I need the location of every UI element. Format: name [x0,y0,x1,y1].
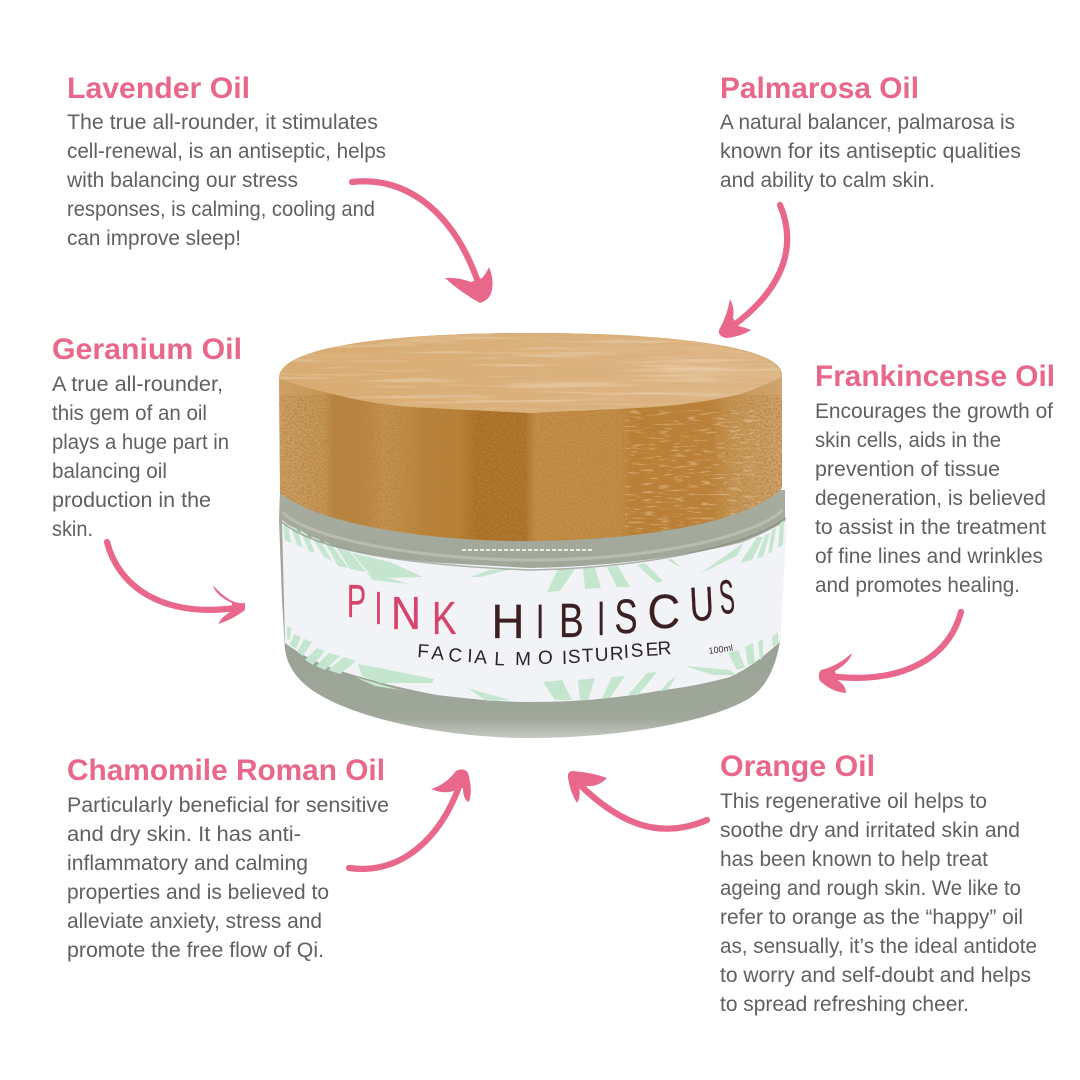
label text: HIBISCUS: I [597,593,605,646]
label text: HIBISCUS: S [614,589,638,643]
label text: HIBISCUS: I [536,596,544,649]
label text: HIBISCUS: B [559,594,584,648]
description: The true all-rounder, it stimulates [67,111,378,134]
description: A natural balancer, palmarosa is [720,111,1015,134]
lid wood grain [279,333,782,415]
description: soothe dry and irritated skin and [720,819,1020,842]
description: and ability to calm skin. [720,169,935,192]
label text: PINK: I [374,583,382,635]
description: properties and is believed to [67,881,329,904]
description: promote the free flow of Qi. [67,939,324,962]
description: with balancing our stress [66,169,298,192]
description: plays a huge part in [52,431,229,454]
description: alleviate anxiety, stress and [67,910,322,933]
description: to worry and self-doubt and helps [720,964,1031,987]
panel: Orange Oil [720,750,1037,1016]
panel: Chamomile Roman Oil [67,754,389,962]
label text: PINK: N [391,588,421,640]
glass jar body [279,490,785,738]
bamboo lid texture [279,395,782,545]
jar label [282,520,787,702]
description: this gem of an oil [52,402,207,425]
heading: Lavender Oil [67,72,250,105]
description: and promotes healing. [815,574,1020,597]
panel: Lavender Oil [66,72,386,250]
label leaf pattern [283,520,784,701]
label text: HIBISCUS: U [688,576,715,631]
arrow: Orange to jar [568,771,707,829]
product jar photo [279,333,787,738]
glass rim highlights [283,510,783,560]
description [66,111,386,250]
description: prevention of tissue [815,458,1000,481]
description: can improve sleep! [67,227,241,250]
description: A true all-rounder, [52,373,223,396]
label text: PINK: P [347,576,366,628]
label text: FACIAL MOISTURISER: FACIALMOISTURISER [417,638,672,671]
description: responses, is calming, cooling and [67,198,375,221]
label text: HIBISCUS: S [717,569,737,624]
description [720,790,1037,1016]
arrow: Palmarosa to jar [719,205,787,338]
bamboo lid top [279,333,782,413]
label text: PINK [347,576,457,644]
description: production in the [52,489,211,512]
arrow: Lavender to jar [352,181,493,303]
heading: Orange Oil [720,750,875,783]
panel: Geranium Oil [52,333,242,541]
label text: 100ml: 100ml [708,643,734,656]
description: as, sensually, it’s the ideal antidote [720,935,1037,958]
heading: Frankincense Oil [815,360,1055,393]
description: of fine lines and wrinkles [815,545,1043,568]
arrow: Geranium to jar [107,542,245,624]
description [52,373,229,541]
arrow: Frankincense to jar [819,612,961,693]
heading: Chamomile Roman Oil [67,754,385,787]
description: to assist in the treatment [815,516,1046,539]
glass sparkle [462,549,592,551]
panel: Palmarosa Oil [720,72,1021,192]
bamboo lid side [279,333,782,541]
description: refer to orange as the “happy” oil [720,906,1023,929]
description: to spread refreshing cheer. [720,993,969,1016]
arrow: Chamomile to jar [349,769,471,869]
description: ageing and rough skin. We like to [720,877,1021,900]
label text: HIBISCUS: H [492,595,524,648]
description: This regenerative oil helps to [720,790,987,813]
description: and dry skin. It has anti- [67,823,301,846]
description [720,111,1021,192]
heading: Palmarosa Oil [720,72,919,105]
description: balancing oil [52,460,167,483]
description [67,794,389,962]
description: has been known to help treat [720,848,988,871]
label text: PINK: K [432,592,457,644]
description: skin cells, aids in the [815,429,1001,452]
heading: Geranium Oil [52,333,242,366]
description: Particularly beneficial for sensitive [67,794,389,817]
description: cell-renewal, is an antiseptic, helps [67,140,386,163]
description: known for its antiseptic qualities [720,140,1021,163]
description: degeneration, is believed [815,487,1046,510]
label text: HIBISCUS: C [648,585,680,638]
description: inflammatory and calming [67,852,308,875]
panel: Frankincense Oil [815,360,1055,597]
description: skin. [52,518,93,541]
description [815,400,1053,597]
description: Encourages the growth of [815,400,1053,423]
label text: HIBISCUS [492,569,737,649]
glass shadow line [282,518,786,570]
